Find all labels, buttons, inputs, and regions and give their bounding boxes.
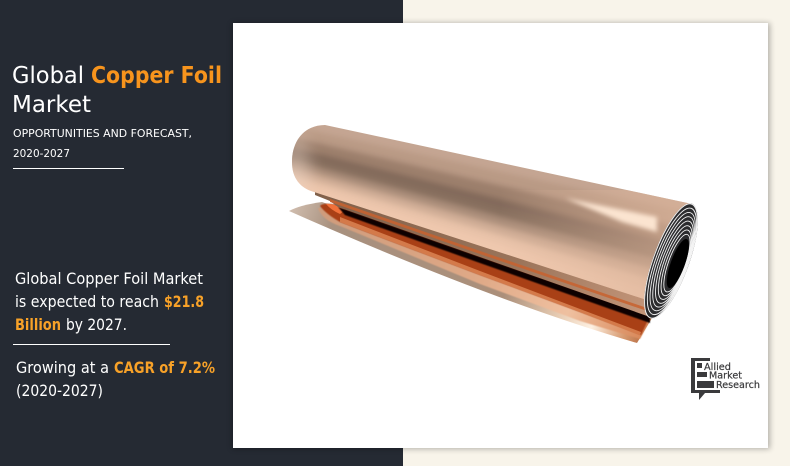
light copper line in inner sheet bbox=[340, 217, 641, 335]
icon: copper foil roll bbox=[289, 125, 698, 343]
title: Copper Foil bbox=[91, 61, 222, 89]
logo: Allied Market Research bbox=[691, 358, 760, 400]
subtitle: 2020-2027 bbox=[13, 147, 70, 160]
left end shading bbox=[292, 134, 316, 184]
text block: market value: is expected to reach bbox=[15, 292, 159, 311]
text block: market value bbox=[15, 269, 204, 334]
specular highlight bbox=[565, 198, 657, 232]
logo icon bbox=[691, 358, 720, 400]
roll body bbox=[292, 125, 690, 299]
bright copper ripple at sheet start bbox=[326, 204, 345, 214]
text block: CAGR: Growing at a bbox=[16, 358, 109, 377]
underside rim of roll bbox=[315, 190, 650, 317]
text block: CAGR: CAGR of 7.2% bbox=[114, 358, 215, 377]
black gap bbox=[338, 207, 650, 323]
roll end with spiral layers bbox=[633, 198, 709, 324]
background: cream right half bbox=[403, 0, 790, 466]
white panel shadow bbox=[232, 23, 770, 449]
subtitle: OPPORTUNITIES AND FORECAST, bbox=[13, 127, 192, 140]
text block: market value: $21.8 bbox=[164, 292, 204, 311]
title: Global bbox=[12, 61, 84, 89]
right side lightening bbox=[526, 190, 689, 298]
text block: market value: Global Copper Foil Market bbox=[15, 269, 203, 288]
orange inner sheet bbox=[320, 204, 650, 335]
lower foil sheet bbox=[289, 202, 652, 343]
background: dark left half bbox=[0, 0, 403, 466]
text block: CAGR: (2020-2027) bbox=[16, 381, 103, 400]
title bbox=[12, 61, 222, 118]
peach stripe bbox=[318, 208, 650, 339]
subtitle bbox=[13, 127, 192, 160]
logo text: Market bbox=[709, 370, 742, 382]
panel: white image panel bbox=[233, 23, 768, 448]
text block: CAGR bbox=[16, 358, 215, 400]
text block: market value: by 2027. bbox=[66, 315, 127, 334]
logo text: Allied bbox=[704, 362, 731, 373]
logo text: Research bbox=[716, 380, 760, 391]
logo text bbox=[704, 362, 760, 391]
rim copper lines bbox=[330, 199, 650, 312]
text block: market value: Billion bbox=[15, 315, 61, 334]
title: Market bbox=[12, 90, 91, 118]
